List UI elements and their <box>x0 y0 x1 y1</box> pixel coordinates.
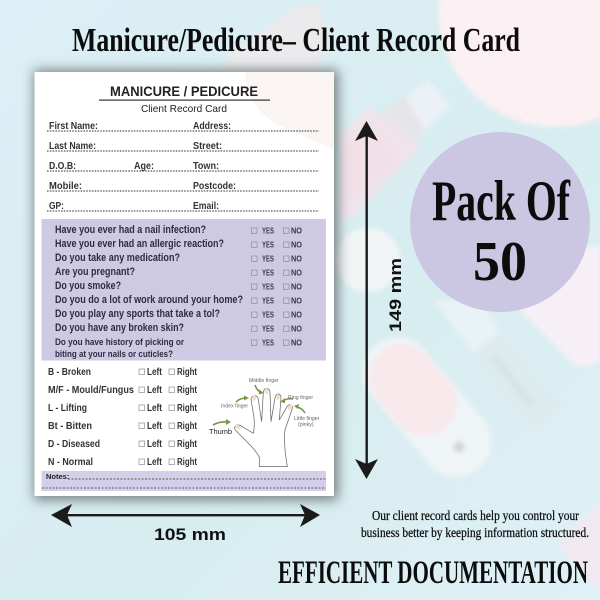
personal details fields: Last Name: <box>49 141 96 152</box>
finger arrows <box>213 385 305 425</box>
description text <box>361 508 589 540</box>
card heading: MANICURE / PEDICURE <box>110 83 258 99</box>
finger arrowheads <box>226 390 299 425</box>
left/right checkboxes: Right <box>177 457 198 468</box>
personal details fields: Postcode: <box>193 181 236 192</box>
yes/no checkboxes: NO <box>291 310 302 320</box>
left/right checkboxes <box>139 367 198 468</box>
left/right checkboxes: Left <box>147 403 163 414</box>
notes panel <box>42 471 326 491</box>
personal details fields: Mobile: <box>49 181 82 192</box>
yes/no checkboxes: NO <box>291 254 302 264</box>
background: pale blob behind title <box>225 5 328 72</box>
yes/no checkboxes: NO <box>291 324 302 334</box>
personal details fields <box>47 121 319 212</box>
background: large pale container <box>520 245 600 366</box>
nail condition key: Bt - Bitten <box>48 421 92 432</box>
nail marks <box>234 388 293 430</box>
nail condition key <box>48 367 198 468</box>
left/right checkboxes: Right <box>177 367 198 378</box>
personal details fields: Street: <box>193 141 222 152</box>
yes/no checkboxes <box>252 226 302 348</box>
left/right checkboxes: Right <box>177 385 198 396</box>
height label: 149 mm <box>386 258 405 332</box>
yes/no checkboxes: NO <box>291 338 302 348</box>
yes/no checkboxes: YES <box>262 338 274 348</box>
background: bottle <box>340 80 450 220</box>
questions panel: biting at your nails or cuticles? <box>55 349 173 360</box>
questions panel: Have you ever had an allergic reaction? <box>55 238 224 250</box>
yes/no checkboxes: YES <box>262 324 274 334</box>
left/right checkboxes: Right <box>177 439 198 450</box>
width label: 105 mm <box>154 525 226 544</box>
questions panel: Do you play any sports that take a tol? <box>55 308 220 320</box>
personal details fields: D.O.B: <box>49 161 76 172</box>
notes panel: Notes: <box>46 472 69 481</box>
background: pink corner <box>557 503 600 593</box>
questions panel: Do you have any broken skin? <box>55 322 184 334</box>
nail condition key: L - Lifting <box>48 403 87 414</box>
background: pumice brush <box>348 323 540 508</box>
hand diagram: Thumb <box>209 427 232 436</box>
background: spray bottle <box>433 300 562 432</box>
hand diagram: Ring finger <box>288 395 313 401</box>
personal details fields: Address: <box>193 121 231 132</box>
nail condition key: B - Broken <box>48 367 91 378</box>
yes/no checkboxes: YES <box>262 226 274 236</box>
personal details fields: Town: <box>193 161 219 172</box>
yes/no checkboxes: YES <box>262 282 274 292</box>
hand diagram <box>209 378 320 467</box>
questions panel: Do you do a lot of work around your home? <box>55 294 243 306</box>
yes/no checkboxes: NO <box>291 296 302 306</box>
hand diagram: Little finger <box>294 416 320 422</box>
personal details fields: First Name: <box>49 121 98 132</box>
nail condition key: D - Diseased <box>48 439 100 450</box>
yes/no checkboxes: NO <box>291 240 302 250</box>
hand diagram: Middle finger <box>249 378 279 384</box>
height arrow <box>355 121 378 479</box>
background: sponge <box>438 0 600 127</box>
questions panel: Are you pregnant? <box>55 266 135 278</box>
width arrow <box>51 504 320 527</box>
card heading <box>99 83 270 115</box>
yes/no checkboxes: YES <box>262 254 274 264</box>
personal details fields: Email: <box>193 201 219 212</box>
yes/no checkboxes: YES <box>262 240 274 250</box>
left/right checkboxes: Right <box>177 421 198 432</box>
finger labels: Index finger <box>221 404 248 410</box>
left/right checkboxes: Left <box>147 457 163 468</box>
background: round pad <box>336 228 400 292</box>
personal details fields: Age: <box>134 161 154 172</box>
left/right checkboxes: Left <box>147 385 163 396</box>
yes/no checkboxes: NO <box>291 282 302 292</box>
card heading: Client Record Card <box>141 103 227 115</box>
questions panel: Do you smoke? <box>55 280 121 292</box>
left/right checkboxes: Left <box>147 367 163 378</box>
questions panel <box>42 219 326 360</box>
nail condition key: N - Normal <box>48 457 93 468</box>
left/right checkboxes: Left <box>147 421 163 432</box>
questions panel: Do you take any medication? <box>55 252 180 264</box>
nail condition key: M/F - Mould/Fungus <box>48 385 134 396</box>
yes/no checkboxes: YES <box>262 310 274 320</box>
pack of 50 badge: 50 <box>473 231 527 293</box>
left/right checkboxes: Left <box>147 439 163 450</box>
pack of 50 badge <box>410 132 590 312</box>
left/right checkboxes: Right <box>177 403 198 414</box>
yes/no checkboxes: NO <box>291 226 302 236</box>
yes/no checkboxes: YES <box>262 268 274 278</box>
hand diagram: (pinky) <box>298 422 314 428</box>
personal details fields: GP: <box>49 201 64 212</box>
record card <box>34 72 334 496</box>
questions panel: Have you ever had a nail infection? <box>55 224 206 236</box>
questions panel: Do you have history of picking or <box>55 337 184 348</box>
card shadow <box>34 70 338 500</box>
yes/no checkboxes: YES <box>262 296 274 306</box>
yes/no checkboxes: NO <box>291 268 302 278</box>
